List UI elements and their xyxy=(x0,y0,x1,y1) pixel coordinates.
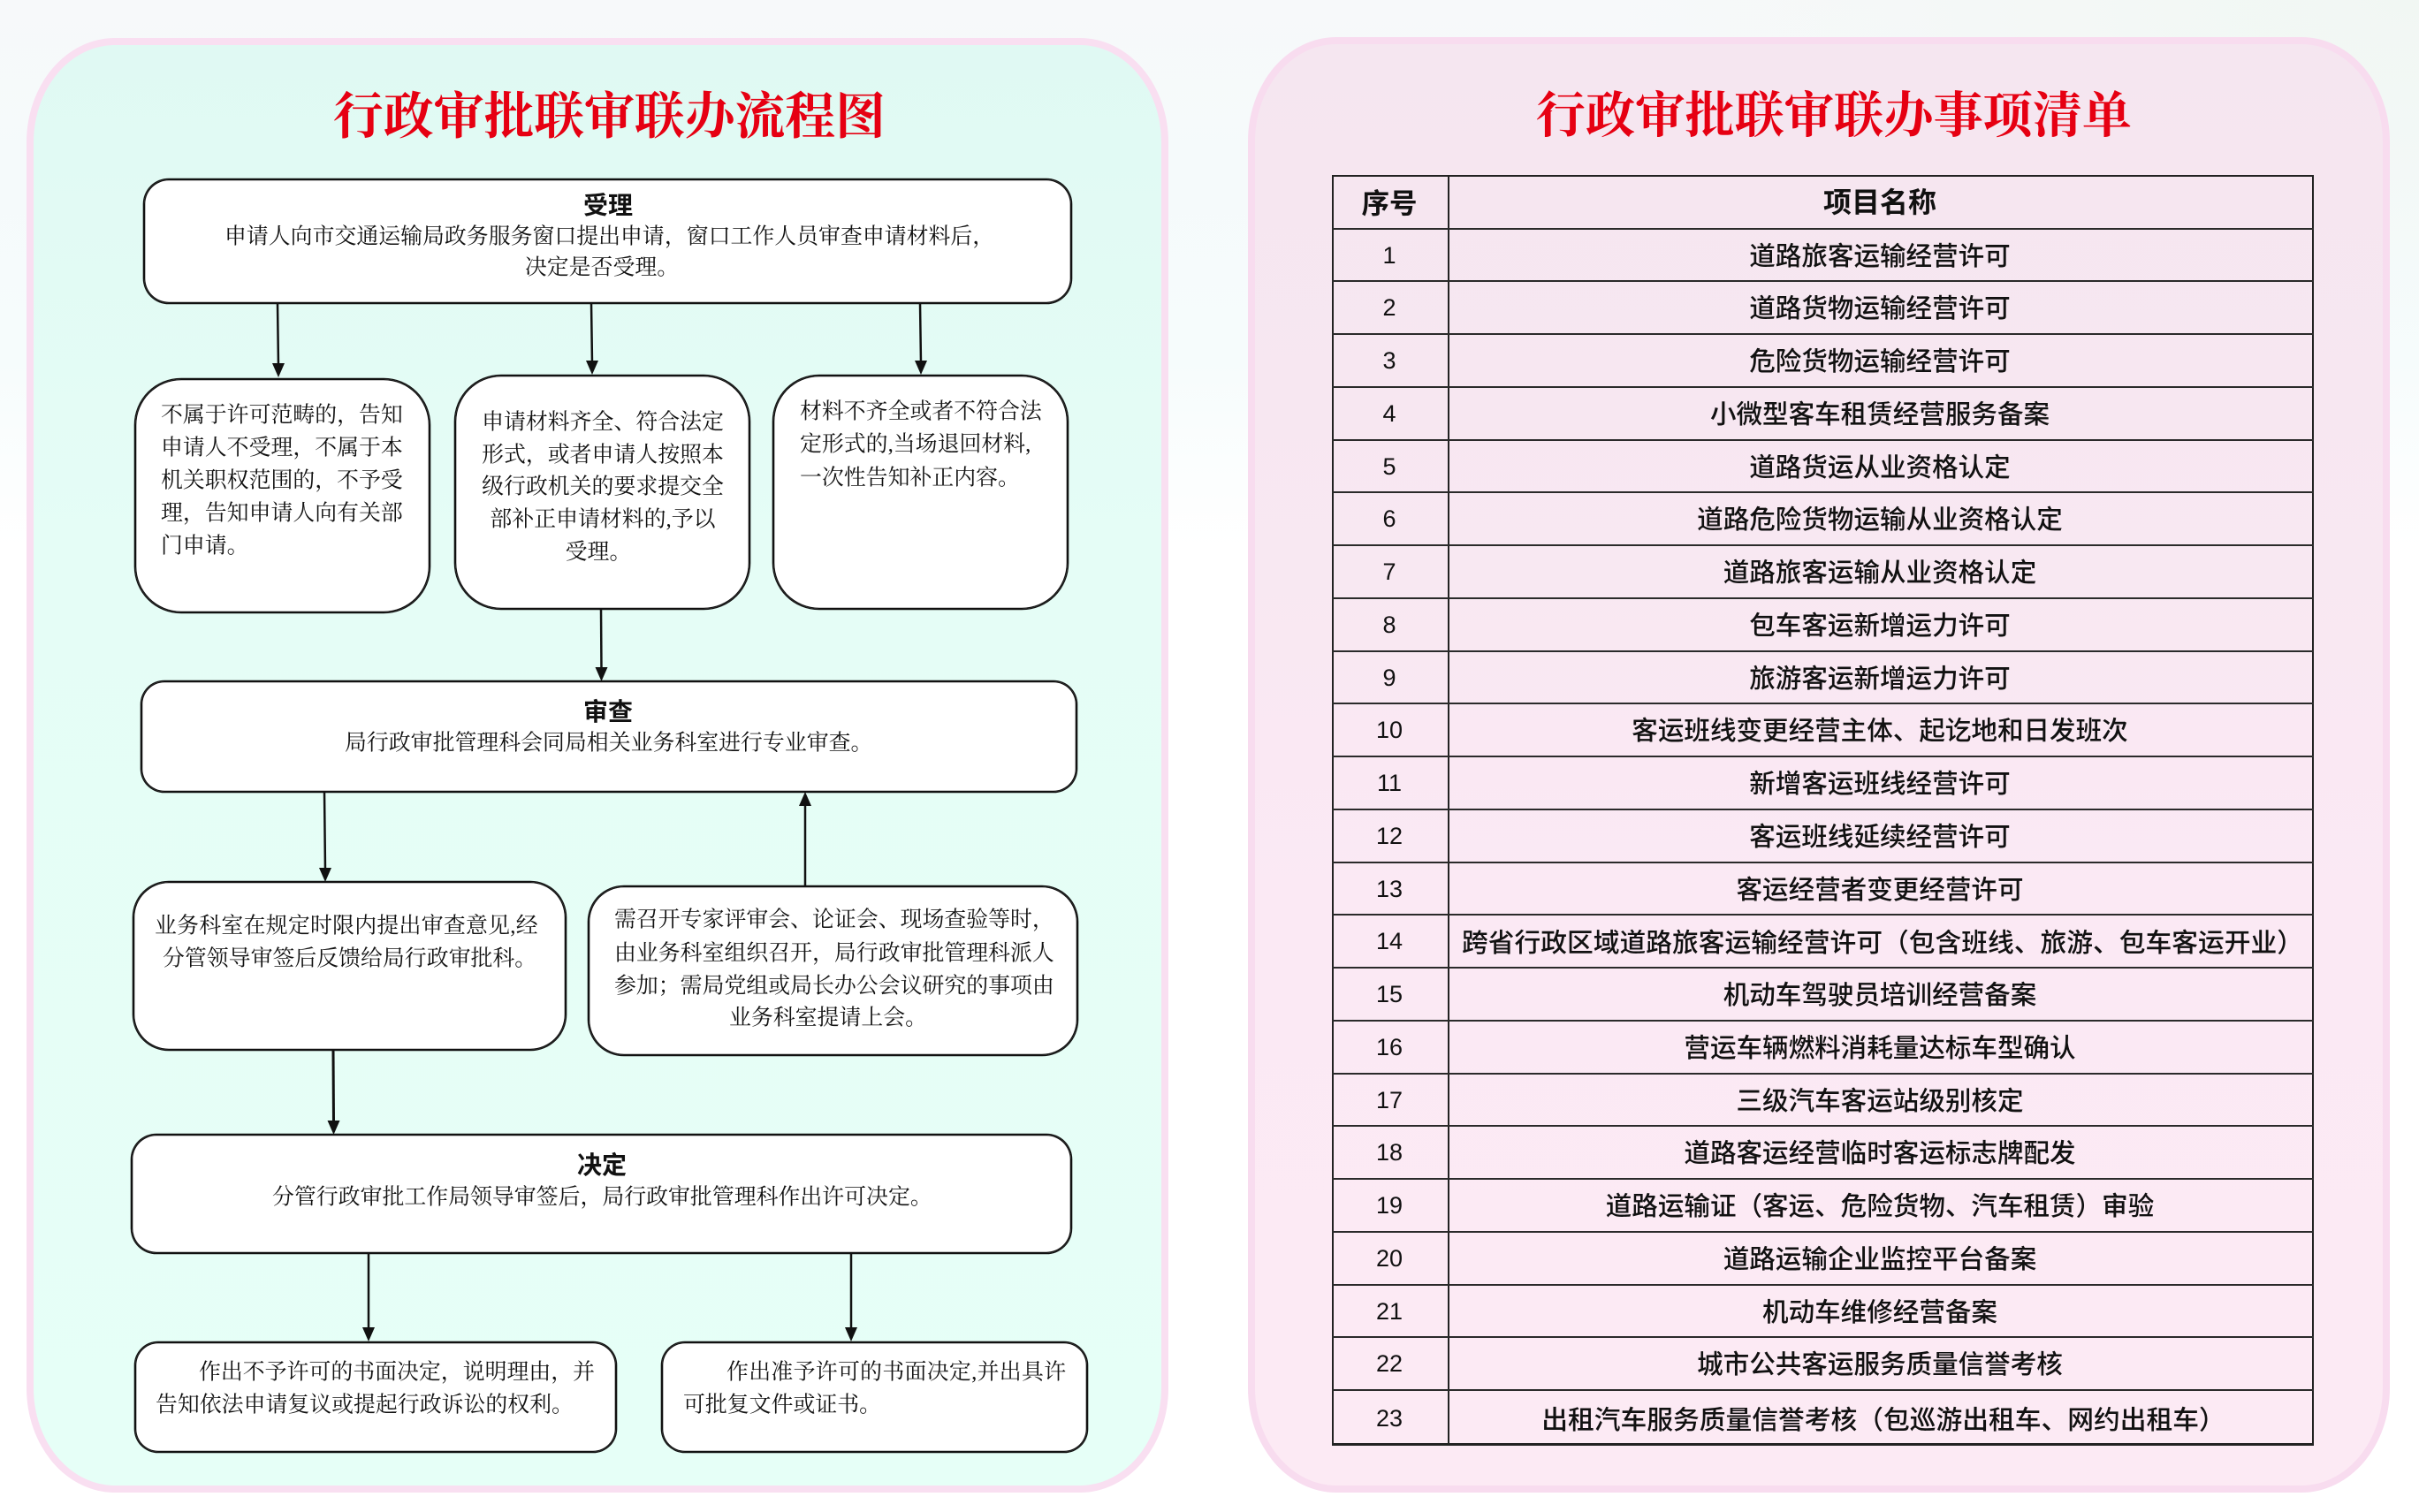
box: 受理: 申请人向市交通运输局政务服务窗口提出申请，窗口工作人员审查申请材料后， xyxy=(224,224,994,249)
box: 予以受理: 受理。 xyxy=(566,541,631,564)
table: item list: 11 xyxy=(1377,770,1402,796)
box: 准予许可 xyxy=(662,1342,1087,1452)
box: 予以受理: 级行政机关的要求提交全 xyxy=(482,475,724,498)
table: item list: 3 xyxy=(1382,347,1396,374)
box: 审查意见 xyxy=(133,882,566,1050)
table: item list: 道路货物运输经营许可 xyxy=(1749,287,2011,325)
box: 决定: 分管行政审批工作局领导审签后，局行政审批管理科作出许可决定。 xyxy=(272,1186,932,1209)
table: item list xyxy=(1332,175,2314,1446)
table: item list: 道路货运从业资格认定 xyxy=(1749,445,2011,484)
table: item list: 客运班线延续经营许可 xyxy=(1749,816,2011,854)
title: item list: 行政审批联审联办事项清单 xyxy=(1536,76,2132,148)
table: item list: 14 xyxy=(1376,928,1403,954)
table: item list: 5 xyxy=(1382,452,1396,479)
arrow: 受理 to 予以受理 xyxy=(586,303,598,375)
table: item list: 17 xyxy=(1376,1087,1403,1113)
table header: 项目名称 xyxy=(1823,180,1936,221)
box: 受理: 受理 xyxy=(583,186,633,222)
box: 予以受理: 形式，或者申请人按照本 xyxy=(482,444,724,467)
table: item list: 8 xyxy=(1382,612,1396,638)
table: item list: 机动车维修经营备案 xyxy=(1762,1290,1997,1329)
table header: 序号 xyxy=(1361,180,1418,221)
table: item list: 4 xyxy=(1382,400,1396,427)
table: item list: 21 xyxy=(1376,1297,1403,1324)
table: item list: 营运车辆燃料消耗量达标车型确认 xyxy=(1684,1027,2076,1065)
box: 专家评审: 参加；需局党组或局长办公会议研究的事项由 xyxy=(614,974,1054,999)
arrow: 审查 to 审查意见 xyxy=(319,792,331,882)
arrow: 受理 to 不予受理 xyxy=(272,303,285,377)
table: item list: 2 xyxy=(1382,294,1396,321)
box: 不予许可 xyxy=(135,1342,616,1452)
box: 不予受理: 机关职权范围的，不予受 xyxy=(161,468,403,493)
box: 退回材料: 一次性告知补正内容。 xyxy=(800,467,1020,490)
box: 不予许可: 告知依法申请复议或提起行政诉讼的权利。 xyxy=(156,1393,574,1417)
table: item list: 道路旅客运输经营许可 xyxy=(1749,235,2011,272)
box: 专家评审: 由业务科室组织召开，局行政审批管理科派人 xyxy=(614,942,1054,965)
box: 审查意见: 分管领导审签后反馈给局行政审批科。 xyxy=(163,947,536,970)
table: item list: 机动车驾驶员培训经营备案 xyxy=(1723,974,2036,1012)
table: item list: 9 xyxy=(1382,665,1396,691)
table: item list: 12 xyxy=(1376,823,1403,849)
table: item list: 三级汽车客运站级别核定 xyxy=(1736,1080,2024,1117)
box: 决定 xyxy=(132,1135,1071,1253)
box: 不予受理: 门申请。 xyxy=(161,534,249,558)
table: item list: 15 xyxy=(1376,981,1403,1007)
box: 退回材料: 材料不齐全或者不符合法 xyxy=(800,399,1042,424)
table: item list: 23 xyxy=(1376,1405,1403,1432)
table: item list: 道路运输证（客运、危险货物、汽车租赁）审验 xyxy=(1606,1185,2154,1223)
arrow: 专家评审 to 审查 xyxy=(799,792,811,886)
box: 不予许可: 作出不予许可的书面决定，说明理由，并 xyxy=(199,1361,595,1384)
title: flow chart: 行政审批联审联办流程图 xyxy=(333,77,886,148)
box: 不予受理: 申请人不受理，不属于本 xyxy=(161,437,403,460)
box: 不予受理: 不属于许可范畴的，告知 xyxy=(161,403,403,428)
box: 不予受理 xyxy=(135,379,430,612)
table: item list: 16 xyxy=(1376,1034,1403,1060)
table: item list: 20 xyxy=(1376,1245,1403,1272)
panel: flow chart xyxy=(27,38,1168,1493)
table: item list: 跨省行政区域道路旅客运输经营许可（包含班线、旅游、包车客运开业） xyxy=(1462,921,2303,960)
table: item list: 22 xyxy=(1376,1350,1403,1377)
box: 审查: 局行政审批管理科会同局相关业务科室进行专业审查。 xyxy=(345,732,872,755)
box: 审查: 审查 xyxy=(583,693,633,728)
box: 予以受理: 部补正申请材料的,予以 xyxy=(490,507,716,532)
table: item list: 道路运输企业监控平台备案 xyxy=(1723,1238,2036,1276)
table: item list: 危险货物运输经营许可 xyxy=(1749,340,2011,378)
table: item list: 道路危险货物运输从业资格认定 xyxy=(1697,498,2063,536)
arrow: 决定 to 不予许可 xyxy=(362,1253,375,1341)
table: item list: 7 xyxy=(1382,558,1396,585)
table: item list: 包车客运新增运力许可 xyxy=(1749,604,2011,642)
box: 受理: 决定是否受理。 xyxy=(525,256,679,279)
table: item list: 新增客运班线经营许可 xyxy=(1749,763,2011,801)
box: 退回材料 xyxy=(773,376,1068,609)
table: item list: 13 xyxy=(1376,875,1403,901)
arrow: 受理 to 退回材料 xyxy=(915,303,927,375)
panel: item list xyxy=(1248,37,2390,1493)
table: item list: 18 xyxy=(1376,1139,1403,1166)
table: item list: 小微型客车租赁经营服务备案 xyxy=(1710,393,2050,431)
table: item list: 道路客运经营临时客运标志牌配发 xyxy=(1684,1132,2076,1170)
box: 不予受理: 理，告知申请人向有关部 xyxy=(161,502,403,525)
box: 专家评审: 需召开专家评审会、论证会、现场查验等时， xyxy=(614,908,1054,931)
table: item list: 出租汽车服务质量信誉考核（包巡游出租车、网约出租车） xyxy=(1541,1398,2225,1437)
box: 准予许可: 可批复文件或证书。 xyxy=(683,1393,881,1417)
box: 准予许可: 作出准予许可的书面决定,并出具许 xyxy=(726,1361,1066,1384)
box: 退回材料: 定形式的,当场退回材料, xyxy=(800,433,1031,456)
table: item list: 城市公共客运服务质量信誉考核 xyxy=(1697,1343,2063,1381)
box: 专家评审 xyxy=(589,886,1077,1055)
box: 审查意见: 业务科室在规定时限内提出审查意见,经 xyxy=(155,914,538,938)
table: item list: 道路旅客运输从业资格认定 xyxy=(1723,551,2036,589)
table: item list: 客运班线变更经营主体、起讫地和日发班次 xyxy=(1632,710,2128,748)
box: 予以受理: 申请材料齐全、符合法定 xyxy=(482,410,724,435)
arrow: 审查意见 to 决定 xyxy=(327,1050,339,1135)
box: 予以受理 xyxy=(455,376,749,609)
box: 专家评审: 业务科室提请上会。 xyxy=(729,1006,927,1030)
table: item list: 1 xyxy=(1382,242,1396,269)
table header xyxy=(1331,177,2314,230)
table: item list: 6 xyxy=(1382,505,1396,532)
table: item list: 10 xyxy=(1376,717,1403,743)
box: 受理 xyxy=(144,179,1071,303)
arrow: 决定 to 准予许可 xyxy=(845,1253,857,1341)
table: item list: 19 xyxy=(1376,1192,1403,1219)
table: item list: 旅游客运新增运力许可 xyxy=(1749,657,2011,695)
arrow: 予以受理 to 审查 xyxy=(596,609,608,681)
box: 审查 xyxy=(141,681,1076,792)
table: item list: 客运经营者变更经营许可 xyxy=(1736,868,2024,907)
box: 决定: 决定 xyxy=(577,1146,627,1181)
